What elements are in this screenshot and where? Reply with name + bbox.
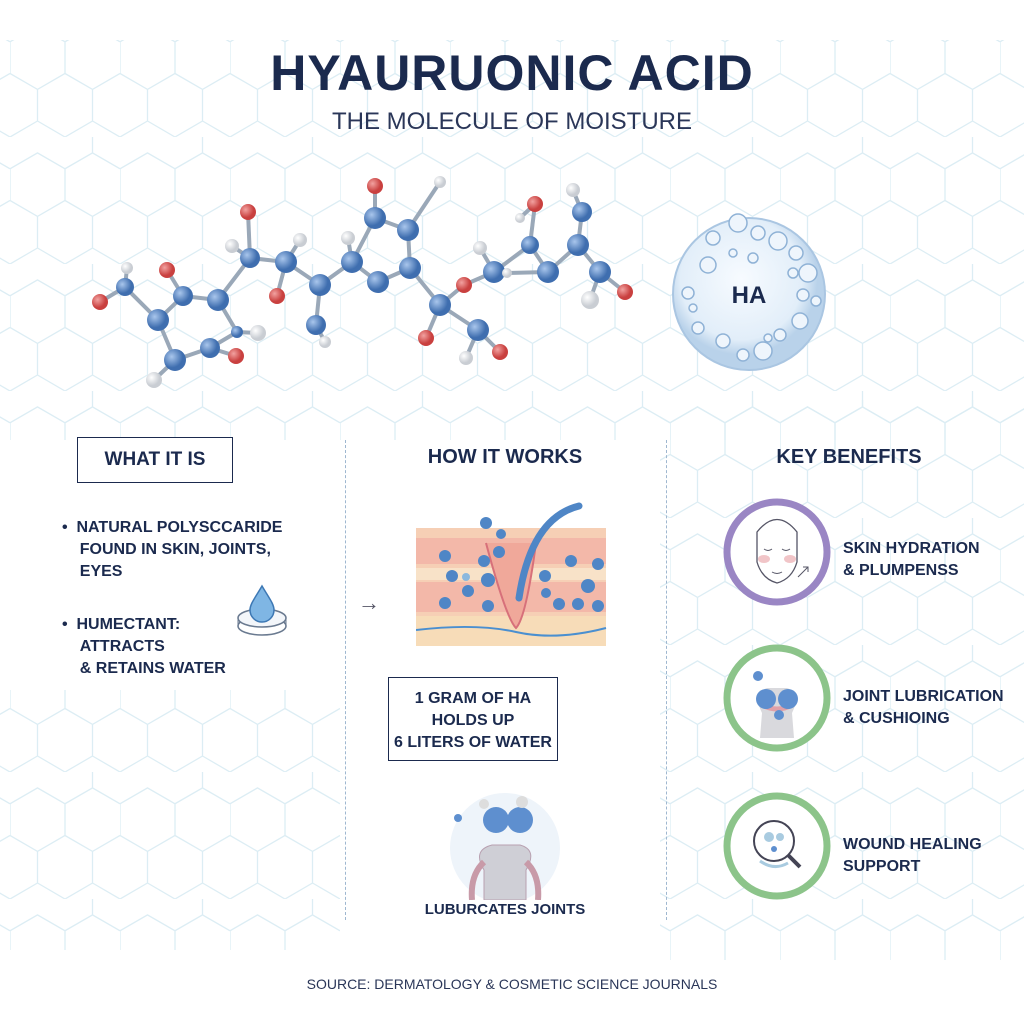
benefit: joint <box>724 644 1004 752</box>
title: HYAURUONIC ACID <box>270 45 754 101</box>
heading: what it is: WHAT IT IS <box>105 449 205 470</box>
skin diagram <box>416 502 606 646</box>
caption: LUBURCATES JOINTS <box>425 901 585 918</box>
callout: 1 gram: 6 LITERS OF WATER <box>394 734 552 751</box>
benefit: wound <box>724 792 982 900</box>
panel: what it is <box>62 437 287 677</box>
source: SOURCE: DERMATOLOGY & COSMETIC SCIENCE JOURNALS <box>307 976 717 992</box>
bullet 1: • NATURAL POLYSCCARIDE <box>62 519 282 536</box>
icon: water drop <box>237 584 287 636</box>
heading: what it is <box>77 437 233 483</box>
bullet 2: ATTRACTS <box>80 638 165 655</box>
panel: how it works <box>358 446 606 918</box>
benefit: wound: SUPPORT <box>843 858 920 875</box>
HA bubble <box>672 213 826 371</box>
bullet 1 <box>62 519 282 580</box>
benefit: wound: WOUND HEALING <box>843 836 982 853</box>
icon: joint <box>450 793 560 900</box>
panel: key benefits <box>724 446 1004 900</box>
bullet 2: • HUMECTANT: <box>62 616 180 633</box>
benefit: skin: SKIN HYDRATION <box>843 540 980 557</box>
benefit: skin: & PLUMPENSS <box>843 562 959 579</box>
dividers <box>345 440 346 920</box>
molecule diagram <box>92 176 633 388</box>
subtitle: THE MOLECULE OF MOISTURE <box>332 108 692 135</box>
bullet 2: & RETAINS WATER <box>80 660 226 677</box>
benefit: joint: JOINT LUBRICATION <box>843 688 1004 705</box>
callout: 1 gram <box>388 677 558 761</box>
callout: 1 gram: HOLDS UP <box>432 712 514 729</box>
arrow: → <box>358 590 380 615</box>
HA bubble: HA <box>732 282 766 309</box>
bullet 1: FOUND IN SKIN, JOINTS, <box>80 541 271 558</box>
heading: HOW IT WORKS <box>428 446 582 468</box>
bullet 2 <box>62 616 226 677</box>
benefit: joint: & CUSHIOING <box>843 710 950 727</box>
callout: 1 gram: 1 GRAM OF HA <box>415 690 531 707</box>
benefit: skin <box>724 498 980 606</box>
heading: KEY BENEFITS <box>776 446 922 468</box>
bullet 1: EYES <box>80 563 122 580</box>
